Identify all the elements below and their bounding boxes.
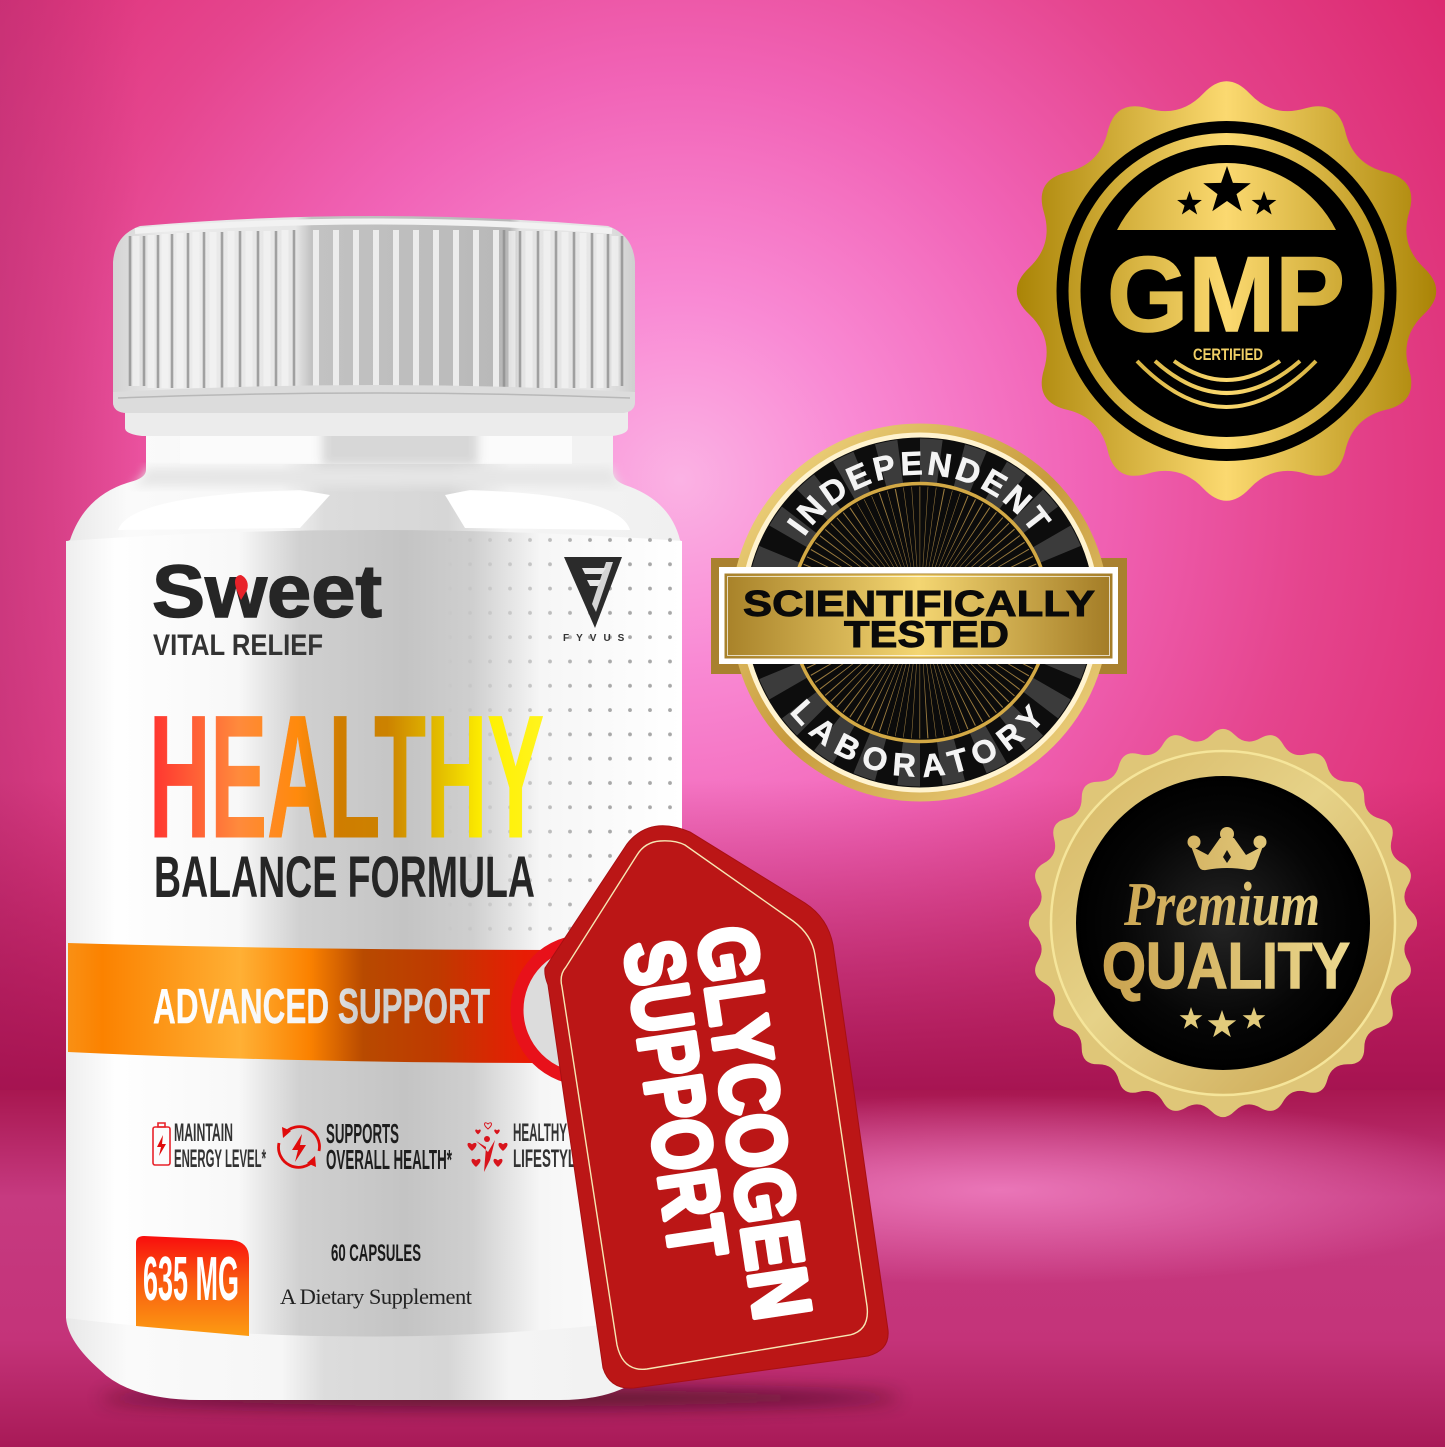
arc text: independent: INDEPENDENT	[786, 451, 1052, 536]
scalloped seal	[1017, 81, 1436, 501]
brand name: Sweet	[152, 550, 382, 633]
product label	[66, 528, 685, 1337]
badge: GMP certified: GMP	[1107, 234, 1345, 354]
bottle body	[66, 430, 682, 1400]
cap	[113, 216, 635, 413]
product label: 635 MG	[143, 1245, 239, 1314]
brand name: VITAL RELIEF	[153, 629, 323, 662]
benefit: overall health: SUPPORTS	[326, 1118, 399, 1149]
icon: FYVUS logo: FYVUS	[563, 633, 631, 644]
tag stitching	[561, 841, 867, 1369]
badge: premium quality: Premium	[1123, 871, 1320, 939]
icon: battery	[153, 1123, 170, 1165]
badge: scientifically tested	[711, 424, 1127, 802]
benefit: healthy lifestyle	[467, 1119, 585, 1173]
badge: premium quality: QUALITY	[1102, 929, 1350, 1002]
badge: premium quality	[1029, 729, 1417, 1117]
supplement bottle	[66, 216, 685, 1400]
dot pattern	[470, 538, 672, 931]
hang tag	[545, 826, 888, 1388]
shoulder and neck shading	[118, 424, 630, 530]
supplement description: A Dietary Supplement	[280, 1284, 473, 1309]
product label: ENERGY LEVEL*	[174, 1145, 266, 1173]
badge: GMP certified	[1017, 81, 1436, 501]
ribbon: SCIENTIFICALLY	[743, 583, 1095, 624]
dosage tag	[136, 1236, 249, 1336]
ribbon: TESTED	[844, 614, 1009, 655]
benefit: overall health	[279, 1118, 452, 1175]
ribbon	[719, 567, 1118, 664]
scalloped edge	[1029, 729, 1417, 1117]
arc text: laboratory: LABORATORY	[790, 698, 1040, 778]
icon: cycle bolt	[279, 1127, 319, 1167]
orange band	[68, 941, 655, 1079]
icon: red drop	[235, 575, 248, 600]
icon: person with hearts	[467, 1123, 508, 1172]
capsule count: 60 CAPSULES	[331, 1240, 421, 1267]
segmented ring	[768, 460, 1072, 764]
arcs	[1137, 361, 1316, 407]
benefit: energy level: MAINTAIN	[174, 1119, 233, 1147]
three stars	[1180, 1007, 1265, 1037]
sunburst rays	[857, 550, 983, 676]
subheadline: BALANCE FORMULA	[154, 845, 535, 910]
red ring	[517, 941, 655, 1079]
orange band: ADVANCED SUPPORT	[153, 980, 490, 1034]
floor shadow	[100, 1389, 900, 1407]
tag text: GLYCOGEN	[679, 920, 828, 1325]
tag text	[606, 920, 828, 1325]
benefit: energy level	[153, 1119, 266, 1173]
product label: HEALTHY	[149, 680, 544, 875]
benefit: healthy lifestyle: HEALTHY	[513, 1119, 567, 1147]
dome with stars	[1117, 163, 1336, 230]
tag text: SUPPORT	[606, 934, 743, 1264]
icon: crown	[1188, 827, 1266, 870]
badge: GMP certified: CERTIFIED	[1193, 346, 1263, 364]
product label: OVERALL HEALTH*	[326, 1144, 452, 1175]
icon: FYVUS logo	[563, 557, 631, 644]
neck collar	[125, 408, 628, 436]
brand name	[152, 550, 382, 662]
benefit: healthy lifestyle: LIFESTYLE	[513, 1145, 585, 1173]
